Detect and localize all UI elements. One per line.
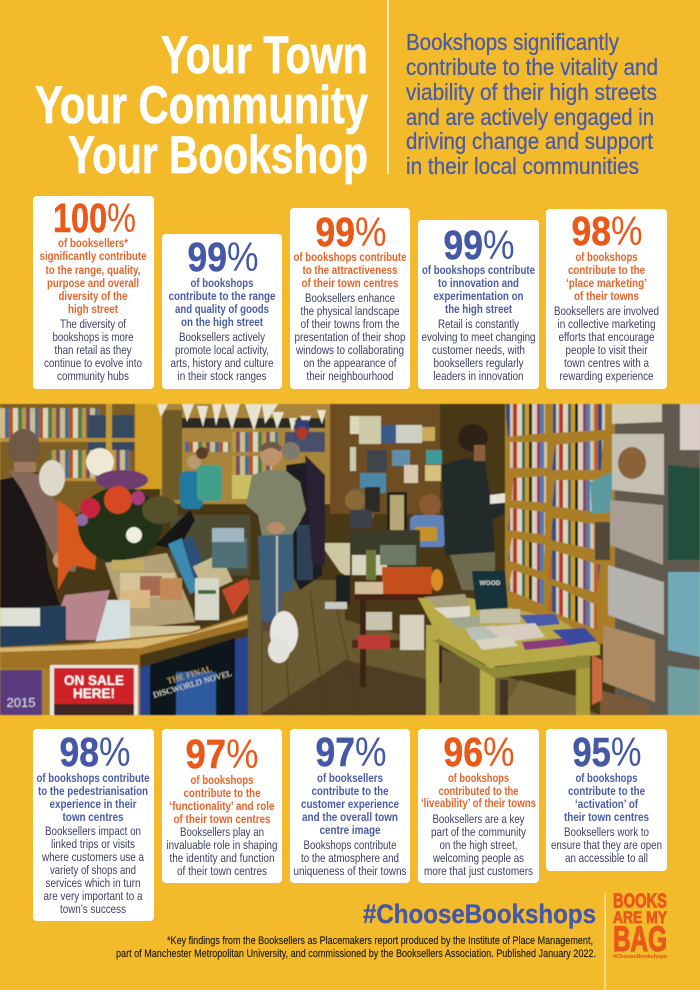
heading: functionality card: of bookshops [190, 773, 254, 787]
heading: customer experience card: customer experience [301, 797, 399, 811]
bunting [157, 404, 326, 432]
heading: 100% card: significantly contribute [40, 249, 147, 263]
heading: customer experience card [301, 771, 399, 837]
poster: on sale: ON SALE [64, 673, 124, 688]
poster: 2015 [0, 670, 42, 715]
heading: liveability card: of bookshops [448, 771, 509, 785]
intro text: in their local communities [406, 153, 639, 179]
body: range card: arts, history and culture [170, 356, 274, 370]
stat: 97% functionality: 97% [186, 731, 258, 777]
heading: innovation card: the high street [445, 302, 512, 316]
body: innovation card: Retail is constantly [438, 317, 520, 331]
heading: innovation card: of bookshops contribute [422, 263, 535, 277]
heading: liveability card: ‘liveability’ of their towns [421, 796, 536, 810]
title: Your Bookshop [68, 126, 368, 185]
hashtag: #ChooseBookshops [363, 899, 596, 929]
intro text: viability of their high streets [406, 79, 657, 105]
heading: place marketing card: of bookshops [576, 250, 638, 264]
book stand [472, 571, 508, 610]
panel: 99% range and quality [162, 234, 282, 389]
body: liveability card: part of the community [431, 825, 527, 839]
stacks and orange box [350, 530, 443, 594]
panel: 97% customer experience [290, 729, 410, 883]
stat: 98% place marketing: 98% [572, 208, 642, 254]
heading: 100% card: high street [68, 302, 118, 316]
body: place marketing card: town centres with a [564, 356, 649, 370]
body: 100% card: continue to evolve into [44, 356, 142, 370]
body: attractiveness card: presentation of their shop [294, 330, 406, 344]
panel: 97% functionality [162, 729, 282, 883]
heading: range card: of bookshops [190, 276, 254, 290]
woman with dog [246, 442, 306, 631]
heading: attractiveness card: to the attractiveness [302, 263, 398, 277]
footnote: *Key findings from the Booksellers as Placemakers report produced by the Institute of Place Management, [167, 935, 593, 947]
body: innovation card: booksellers regularly [434, 356, 524, 370]
title [35, 26, 368, 185]
panel: 99% attractiveness [290, 208, 410, 389]
heading: pedestrianisation card [36, 771, 150, 824]
body: functionality card: invaluable role in shaping [166, 838, 278, 852]
heading: activation card: contribute to the [568, 784, 645, 798]
panel: 100% of booksellers [33, 195, 154, 389]
stat: 99% range: 99% [188, 234, 258, 280]
body: innovation card [422, 317, 536, 383]
body: place marketing card: Booksellers are involved [554, 304, 659, 318]
heading: 100% card: of booksellers* [58, 236, 128, 250]
body: 100% card [44, 317, 142, 383]
main table [418, 594, 600, 715]
stat: 98% pedestrianisation: 98% [60, 729, 130, 775]
stat: 100%: 100% [53, 195, 136, 241]
body: functionality card: of their town centres [177, 864, 267, 878]
body: attractiveness card [294, 291, 406, 383]
body: activation card: Booksellers work to [564, 825, 649, 839]
stat: 96% liveability: 96% [444, 729, 514, 775]
small dark table [352, 594, 447, 687]
heading: pedestrianisation card: of bookshops contribute [36, 771, 150, 785]
body: customer experience card: uniqueness of their towns [294, 864, 406, 878]
heading: customer experience card: and the overall town [302, 810, 398, 824]
heading: customer experience card: of booksellers [317, 771, 383, 785]
heading: 100% card: purpose and overall [47, 276, 139, 290]
dark figures at back [282, 442, 325, 590]
body: activation card: an accessible to all [565, 851, 648, 865]
intro text: driving change and support [406, 128, 653, 154]
body: liveability card [424, 812, 533, 878]
footnote [116, 935, 596, 960]
body: functionality card: the identity and function [170, 851, 275, 865]
logo: Books Are My Bag: BOOKS [613, 890, 667, 912]
body: range card: promote local activity, [175, 343, 269, 357]
body: customer experience card [294, 838, 406, 878]
body: functionality card [166, 825, 278, 878]
panel: 99% innovation [418, 220, 539, 389]
body: pedestrianisation card: where customers use a [41, 850, 144, 864]
heading: innovation card: experimentation on [434, 289, 524, 303]
stat: 95% activation: 95% [572, 729, 642, 775]
body: pedestrianisation card: Booksellers impact on [45, 824, 141, 838]
intro text: and are actively engaged in [406, 104, 654, 130]
intro text: contribute to the vitality and [406, 54, 658, 80]
seated people [345, 490, 446, 547]
body: attractiveness card: Booksellers enhance [305, 291, 395, 305]
heading: liveability card: contributed to the [438, 784, 519, 798]
body: innovation card: customer needs, with [432, 343, 525, 357]
card racks right [592, 404, 700, 715]
heading: 100% card [40, 236, 147, 316]
body: place marketing card: rewarding experience [560, 369, 654, 383]
body: attractiveness card: their neighbourhood [306, 369, 394, 383]
body: 100% card: The diversity of [60, 317, 126, 331]
dog [268, 611, 298, 663]
heading: innovation card [422, 263, 535, 316]
body: attractiveness card: windows to collaborating [295, 343, 404, 357]
heading: activation card [564, 771, 649, 824]
heading: range card: on the high street [181, 315, 263, 329]
title: Your Community [35, 76, 368, 135]
poster: discworld [150, 638, 235, 715]
body: activation card [551, 825, 662, 865]
poster: on sale [50, 665, 138, 715]
heading: activation card: of bookshops [576, 771, 638, 785]
body: 100% card: bookshops is more [52, 330, 134, 344]
heading: attractiveness card: of bookshops contribute [294, 250, 407, 264]
poster: discworld: DISCWORLD NOVEL [152, 668, 233, 700]
logo: Books Are My Bag: BAG [613, 920, 667, 959]
stat: 99% innovation: 99% [444, 222, 514, 268]
heading: pedestrianisation card: town centres [62, 810, 124, 824]
heading: activation card: their town centres [564, 810, 649, 824]
body: innovation card: evolving to meet changing [422, 330, 536, 344]
body: range card: in their stock ranges [178, 369, 266, 383]
poster: on sale: HERE! [73, 686, 115, 701]
heading: innovation card: to innovation and [438, 276, 519, 290]
footnote: part of Manchester Metropolitan University, and commissioned by the Booksellers Association. Published January 2022. [116, 948, 596, 960]
body: functionality card: Booksellers play an [180, 825, 264, 839]
heading: range card: contribute to the range [168, 289, 276, 303]
panel: 98% place marketing [546, 208, 667, 389]
counter display books [155, 510, 250, 620]
body: range card [170, 330, 274, 383]
body: 100% card: than retail as they [54, 343, 132, 357]
table at mid right with seated legs [320, 543, 350, 609]
book stand: WOOD [480, 580, 501, 587]
body: liveability card: on the high street, [440, 838, 518, 852]
body: pedestrianisation card: linked trips or visits [51, 837, 135, 851]
stat: 99% attractiveness: 99% [316, 209, 386, 255]
far back card wall [350, 416, 442, 534]
heading: pedestrianisation card: to the pedestrianisation [38, 784, 148, 798]
body: liveability card: more that just customers [424, 864, 533, 878]
body: pedestrianisation card: variety of shops and [50, 863, 136, 877]
title: Your Town [161, 26, 368, 85]
counter top [0, 606, 248, 668]
body: liveability card: Booksellers are a key [432, 812, 525, 826]
heading: 100% card: to the range, quality, [46, 263, 140, 277]
stat: 97% customer experience: 97% [316, 729, 386, 775]
heading: functionality card [170, 773, 275, 826]
greeting cards display [48, 553, 200, 642]
heading: place marketing card: contribute to the [568, 263, 645, 277]
intro text [406, 29, 658, 179]
body: pedestrianisation card: services which in turn [46, 876, 141, 890]
heading: range card: and quality of goods [175, 302, 269, 316]
intro text: Bookshops significantly [406, 29, 619, 55]
body: pedestrianisation card [41, 824, 144, 916]
heading: 100% card: diversity of the [58, 289, 128, 303]
heading: customer experience card: contribute to the [312, 784, 389, 798]
body: place marketing card [554, 304, 659, 383]
heading: functionality card: contribute to the [184, 786, 261, 800]
body: attractiveness card: on the appearance of [304, 356, 397, 370]
heading: activation card: ‘activation’ of [575, 797, 639, 811]
bookcase [505, 404, 620, 644]
heading: attractiveness card: of their town centres [302, 276, 399, 290]
logo: Books Are My Bag: #ChooseBookshops [613, 954, 667, 960]
body: place marketing card: people to visit their [566, 343, 648, 357]
heading: functionality card: ‘functionality’ and role [170, 799, 275, 813]
body: attractiveness card: the physical landscape [300, 304, 400, 318]
body: range card: Booksellers actively [179, 330, 266, 344]
man at left [0, 429, 80, 610]
heading: place marketing card: of their towns [574, 289, 639, 303]
photo: bookshop interior [0, 404, 700, 715]
body: customer experience card: to the atmosphere and [301, 851, 399, 865]
heading: attractiveness card [294, 250, 407, 290]
woman behind [39, 460, 97, 590]
heading: range card [168, 276, 276, 329]
body: place marketing card: in collective marketing [558, 317, 656, 331]
back figures [180, 420, 309, 509]
body: place marketing card: efforts that encourage [558, 330, 655, 344]
body: pedestrianisation card: are very important to a [44, 889, 143, 903]
body: pedestrianisation card: town’s success [60, 902, 126, 916]
body: 100% card: community hubs [57, 369, 129, 383]
heading: place marketing card [566, 250, 647, 303]
heading: functionality card: of their town centres [174, 812, 271, 826]
body: attractiveness card: of their towns from the [300, 317, 400, 331]
heading: customer experience card: centre image [320, 823, 381, 837]
body: activation card: ensure that they are open [551, 838, 662, 852]
logo: Books Are My Bag: ARE MY [613, 908, 668, 927]
panel: 98% pedestrianisation [33, 729, 154, 921]
body: customer experience card: Bookshops contribute [304, 838, 397, 852]
panel: 95% activation [546, 729, 667, 871]
heading: pedestrianisation card: experience in their [50, 797, 137, 811]
body: liveability card: welcoming people as [432, 851, 524, 865]
panel: 96% liveability [418, 729, 539, 883]
poster: discworld: THE FINAL [166, 664, 213, 686]
floor [248, 580, 600, 715]
logo: Books Are My Bag [613, 890, 668, 960]
body: innovation card: leaders in innovation [434, 369, 524, 383]
flowers [76, 448, 178, 563]
poster: 2015: 2015 [7, 695, 35, 710]
standing man [442, 424, 515, 590]
heading: place marketing card: ‘place marketing’ [566, 276, 647, 290]
heading: liveability card [421, 771, 536, 810]
